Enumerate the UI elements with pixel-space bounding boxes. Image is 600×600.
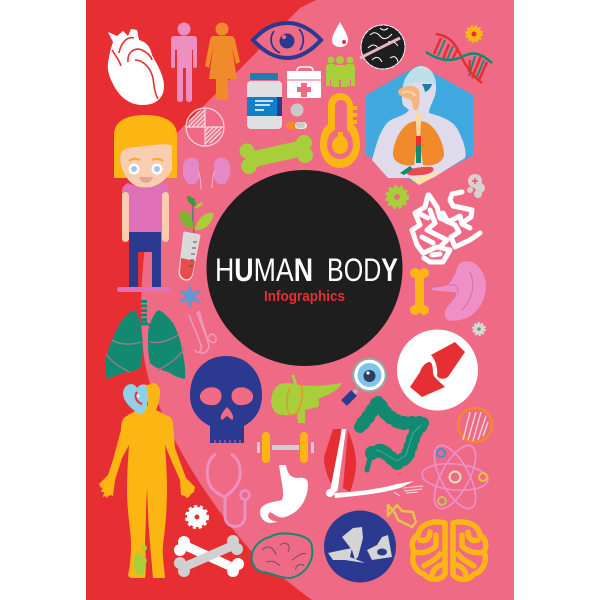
icon: brain outline green — [252, 533, 312, 578]
icon: grey gear — [474, 324, 484, 334]
title: BODY — [327, 252, 398, 288]
panel: respiratory system hexagon — [366, 65, 473, 185]
icon: dumbbell — [257, 432, 314, 463]
icon: snowflake — [182, 288, 198, 305]
icon: green bone — [240, 135, 313, 174]
icon: wind lines — [189, 311, 216, 353]
icon: water drop — [332, 22, 348, 47]
icon: grey cluster — [467, 174, 485, 198]
icon: muscle and arm bones — [324, 429, 423, 498]
icon: plant — [179, 196, 214, 233]
icon: spleen — [432, 261, 486, 321]
icon: kidneys — [183, 158, 230, 190]
icon: test tube — [179, 232, 200, 280]
icon: DNA helix — [426, 34, 492, 83]
icon: green lungs — [105, 300, 185, 379]
icon: quartered pie chart — [186, 108, 224, 146]
icon: pills — [286, 104, 307, 129]
cover background — [86, 0, 514, 600]
icon: yellow bone — [410, 268, 429, 315]
icon: yellow gear top right — [466, 26, 482, 42]
icon: small intestine — [412, 192, 480, 262]
icon: stethoscope — [207, 454, 250, 526]
icon: navy skull — [190, 356, 262, 443]
icon: joint in white circle — [397, 330, 478, 410]
icon: white gear — [187, 507, 207, 527]
icon: colon — [360, 402, 423, 470]
icon: yellow brain — [412, 522, 486, 579]
icon: atom — [421, 440, 489, 514]
icon: black brain with stripe — [360, 25, 405, 69]
icon: pancreas — [271, 375, 342, 423]
icon: eye — [253, 23, 321, 58]
subtitle: Infographics — [264, 288, 345, 305]
icon: thermometer — [320, 93, 360, 168]
icon: girl character — [114, 115, 177, 292]
title: HUMAN — [215, 252, 313, 288]
icon: first aid kit — [287, 67, 321, 98]
icon: magnifying glass and eye — [344, 358, 386, 403]
central circle — [206, 170, 402, 366]
icon: thumbs up — [388, 505, 416, 527]
icon: yellow human body — [99, 383, 195, 578]
icon: green gear — [387, 187, 407, 207]
title — [215, 252, 398, 288]
icon: group of people — [326, 56, 355, 87]
icon: woman figure — [205, 22, 240, 100]
icon: white stomach — [260, 465, 308, 523]
icon: heart — [108, 29, 164, 105]
icon: medicine bottle — [247, 73, 282, 129]
icon: crossbones — [174, 535, 244, 577]
icon: muscle fibres in orange circle — [458, 408, 492, 442]
icon: man figure — [171, 22, 197, 102]
icon: bones in navy circle — [324, 510, 396, 582]
